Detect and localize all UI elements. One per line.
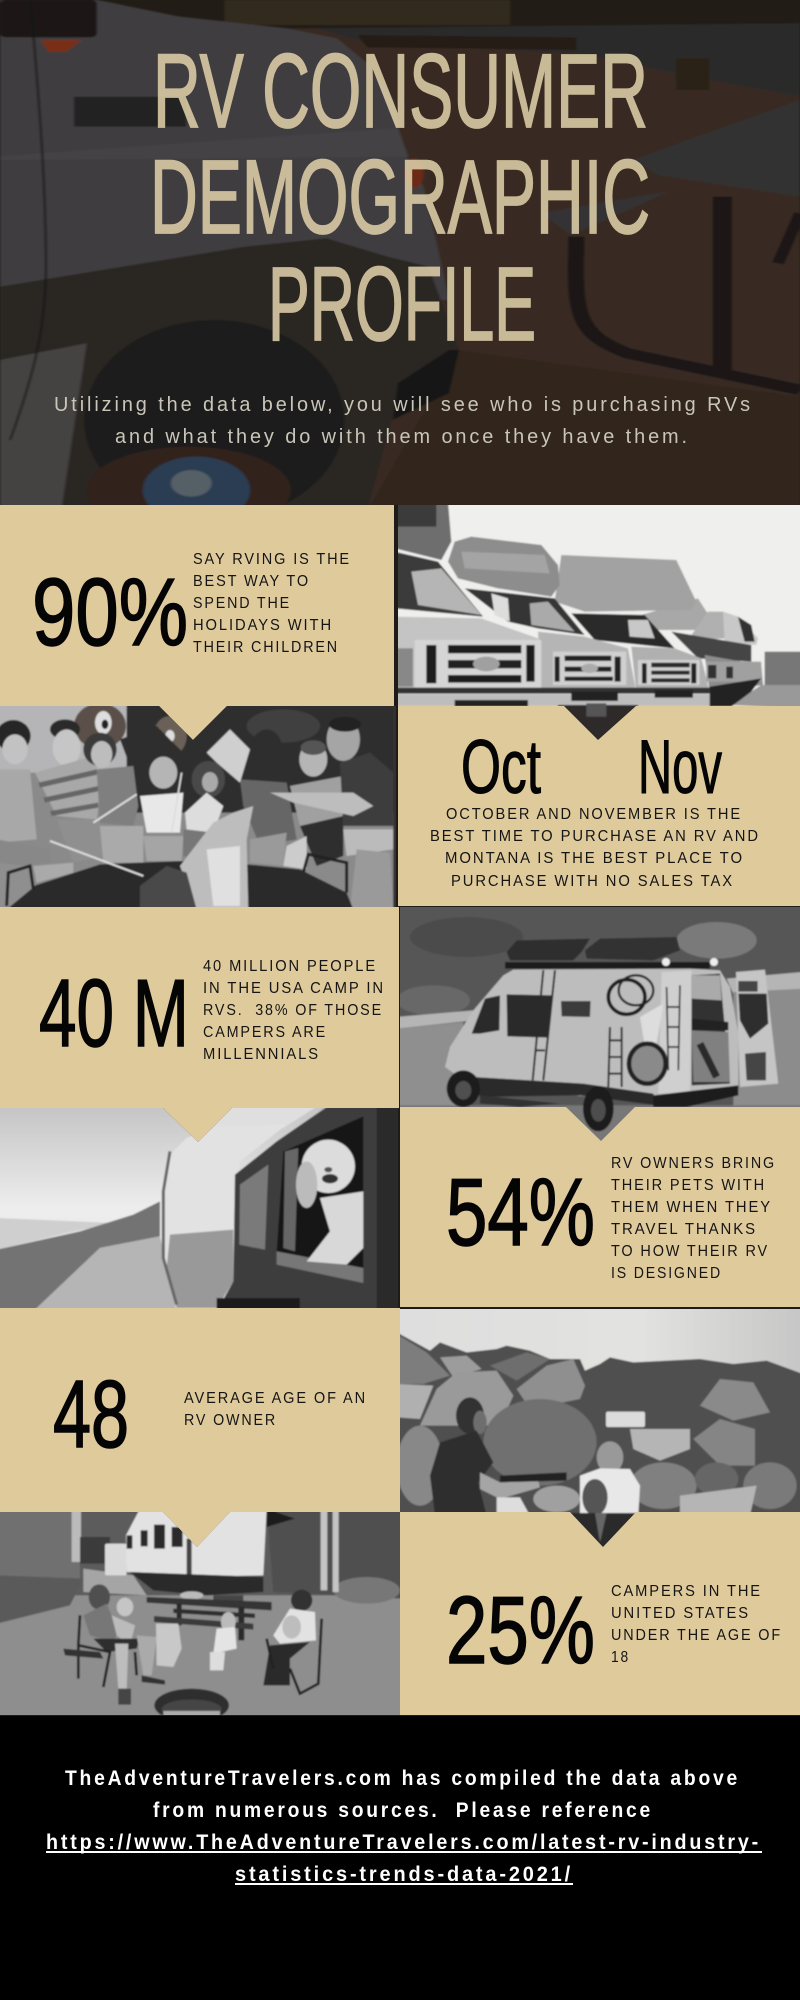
text: holidays description: THEIR CHILDREN — [193, 639, 339, 656]
grille 2 — [553, 652, 626, 685]
text: campers under 18: UNDER THE AGE OF — [611, 1627, 782, 1644]
heading: Oct Nov: Nov — [638, 725, 722, 810]
panel: 90% stat — [0, 505, 394, 740]
panel: footer with source note — [0, 1716, 800, 2000]
text: campers description — [203, 958, 385, 1063]
text: pets description: RV OWNERS BRING — [611, 1155, 776, 1172]
girl 1 — [149, 757, 177, 789]
man — [50, 719, 80, 739]
mom — [255, 730, 281, 742]
text: source note — [65, 1767, 740, 1822]
boulders — [397, 1334, 450, 1384]
number: 90%: 90% — [32, 559, 188, 666]
text: pets description: TRAVEL THANKS — [611, 1221, 757, 1238]
subtitle — [54, 393, 753, 448]
text: pets description: TO HOW THEIR RV — [611, 1243, 769, 1260]
text: best time to purchase: PURCHASE WITH NO SALES TAX — [451, 873, 734, 890]
text: campers description: RVS. 38% OF THOSE — [203, 1002, 383, 1019]
underside and wheels — [653, 1085, 738, 1107]
hero photo: truck and picnic table — [0, 0, 800, 533]
seated man — [89, 1584, 110, 1610]
fire pit — [154, 1689, 229, 1722]
text: campers description: IN THE USA CAMP IN — [203, 980, 385, 997]
grille 1 — [415, 640, 541, 688]
airstream — [165, 1128, 281, 1244]
panel: 54% stat — [400, 1107, 800, 1307]
ladders — [533, 970, 555, 1080]
kids' chair — [156, 1624, 182, 1667]
text: holidays description — [193, 551, 351, 656]
subtitle: and what they do with them once they have them. — [115, 425, 690, 448]
roof boxes — [507, 939, 590, 960]
text: pets description: IS DESIGNED — [611, 1265, 722, 1282]
truck body — [0, 0, 449, 300]
man's chair — [78, 1615, 137, 1687]
text: source note: TheAdventureTravelers.com has compiled the data above — [65, 1767, 740, 1790]
text: campers description: 40 MILLION PEOPLE — [203, 958, 377, 975]
text: best time to purchase: MONTANA IS THE BEST PLACE TO — [445, 850, 744, 867]
text: campers under 18 — [611, 1583, 782, 1666]
photo: family roasting marshmallows — [0, 703, 403, 909]
panel: October and November — [398, 706, 800, 906]
text: source link — [46, 1831, 762, 1886]
right man — [597, 1441, 623, 1473]
cabin and truck — [80, 1537, 110, 1564]
car side — [217, 1105, 403, 1311]
text: holidays description: BEST WAY TO — [193, 573, 310, 590]
open door — [736, 970, 778, 1087]
text: campers description: CAMPERS ARE — [203, 1024, 327, 1041]
text: average age: RV OWNER — [184, 1412, 277, 1429]
text: best time to purchase — [430, 806, 760, 890]
text: campers under 18: UNITED STATES — [611, 1605, 750, 1622]
panel: 48 stat — [0, 1308, 400, 1547]
title: PROFILE — [268, 246, 536, 363]
child — [221, 1612, 236, 1632]
title — [150, 33, 650, 363]
photo: musicians among rocks — [397, 1306, 800, 1552]
picnic table — [633, 100, 800, 197]
heading: Oct Nov — [461, 725, 722, 810]
subtitle: Utilizing the data below, you will see who is purchasing RVs — [54, 393, 753, 416]
small trailer — [606, 1412, 645, 1427]
rear door and interior — [658, 970, 692, 1094]
number: 54%: 54% — [446, 1159, 595, 1266]
picnic table — [180, 1591, 203, 1599]
grille 3 — [638, 660, 700, 685]
text: campers under 18: 18 — [611, 1649, 630, 1666]
woman — [291, 1590, 312, 1611]
number: 25%: 25% — [446, 1577, 595, 1684]
panel: hero with title — [0, 0, 800, 533]
dad — [326, 726, 362, 762]
photo: camper van with bikes — [397, 904, 800, 1149]
wheel arch — [0, 238, 459, 510]
photo: dog in trailer window — [0, 1105, 403, 1311]
number: 48: 48 — [53, 1361, 129, 1468]
RV 1 — [395, 502, 451, 560]
text: best time to purchase: BEST TIME TO PURCHASE AN RV AND — [430, 828, 760, 845]
left man — [456, 1397, 484, 1434]
text: holidays description: HOLIDAYS WITH — [193, 617, 333, 634]
bumpers — [395, 688, 710, 694]
boy — [298, 750, 328, 778]
photo: row of RVs with pointer — [395, 502, 800, 745]
text: campers under 18: CAMPERS IN THE — [611, 1583, 762, 1600]
text: best time to purchase: OCTOBER AND NOVEMBER IS THE — [446, 806, 742, 823]
RV 2 — [448, 537, 560, 597]
flames — [207, 729, 250, 783]
text: source note: from numerous sources. Please reference — [153, 1799, 653, 1822]
bushes — [483, 1399, 597, 1486]
heading: Oct Nov: Oct — [461, 725, 541, 810]
dog — [302, 1140, 355, 1193]
text: average age: AVERAGE AGE OF AN — [184, 1390, 367, 1407]
text: pets description: THEM WHEN THEY — [611, 1199, 772, 1216]
woman 2 — [83, 733, 117, 766]
text: average age — [184, 1390, 367, 1429]
far vehicles — [641, 598, 713, 630]
number: 40 M: 40 M — [39, 960, 189, 1067]
panel: 40 M stat — [0, 907, 399, 1142]
RV 3 — [555, 555, 696, 612]
fire pit — [7, 861, 353, 909]
girl 2 — [192, 761, 225, 798]
text: campers description: MILLENNIALS — [203, 1046, 320, 1063]
text: source link: statistics-trends-data-2021/ — [235, 1863, 573, 1886]
text: source link: https://www.TheAdventureTravelers.com/latest-rv-industry- — [46, 1831, 761, 1854]
bikes — [640, 1004, 662, 1044]
text: holidays description: SAY RVING IS THE — [193, 551, 351, 568]
text: pets description — [611, 1155, 776, 1282]
hoods — [705, 655, 763, 692]
text: pets description: THEIR PETS WITH — [611, 1177, 766, 1194]
mirror and light — [0, 0, 97, 37]
far grilles — [706, 662, 761, 682]
panel: 25% stat — [400, 1511, 800, 1715]
photo: family at campsite — [0, 1509, 403, 1722]
plush toys — [74, 706, 127, 744]
pointer — [558, 705, 638, 745]
trailer — [126, 1509, 267, 1577]
figure in pointer — [567, 1513, 640, 1550]
woman 1 — [0, 720, 31, 752]
van body — [445, 969, 738, 1104]
text: holidays description: SPEND THE — [193, 595, 291, 612]
